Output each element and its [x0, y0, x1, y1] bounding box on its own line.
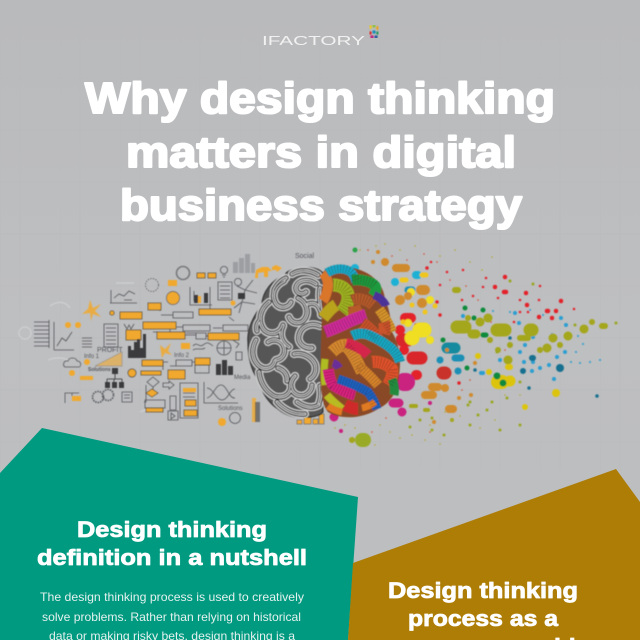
panel body text: The design thinking process is used to creatively	[40, 590, 304, 604]
title: Why design thinking	[85, 74, 555, 123]
green splashes	[497, 376, 503, 383]
logo: iFactory	[262, 26, 378, 48]
panel body text	[40, 590, 304, 640]
doodle captions	[84, 253, 315, 412]
panel heading	[388, 578, 589, 640]
doodle captions: PROFIT	[97, 347, 123, 354]
panel: design thinking definition	[0, 428, 358, 640]
panel: design thinking process	[348, 469, 640, 640]
right hemisphere: coloured swirls	[320, 266, 400, 417]
dark chart bars and skyline	[105, 293, 260, 422]
panel heading: definition in a nutshell	[37, 545, 307, 570]
doodle captions: Info 1	[84, 354, 100, 360]
brain	[248, 266, 400, 417]
yellow splashes	[498, 375, 502, 389]
doodle captions: Solutions	[88, 367, 111, 373]
grey bar chart top right	[233, 254, 255, 273]
doodle captions: Info 2	[174, 353, 190, 359]
orange splashes	[400, 290, 425, 303]
doodle tree connector	[107, 374, 122, 382]
blue splashes	[463, 313, 566, 379]
business doodles on the left of the brain	[19, 253, 324, 426]
panel heading: process as a	[408, 606, 559, 631]
olive splashes	[457, 327, 532, 330]
panel heading: Design thinking	[388, 578, 578, 603]
title: business strategy	[120, 181, 523, 230]
title	[85, 74, 555, 230]
doodle captions: Social	[295, 253, 315, 260]
faint ghost doodles	[19, 283, 162, 412]
left hemisphere: black and white line art	[248, 268, 323, 417]
panel body text: solve problems. Rather than relying on historical	[42, 610, 301, 624]
grey sketch lines and boxes	[34, 266, 257, 424]
logo: iFactory: IFACTORY	[262, 33, 366, 48]
paint splatter on the right of the brain	[334, 244, 616, 445]
fine speckle	[335, 244, 520, 445]
red splashes	[495, 277, 561, 318]
title: matters in digital	[126, 128, 516, 177]
magenta splashes	[404, 373, 406, 391]
orange label boxes	[65, 265, 324, 426]
panel heading: Design thinking	[77, 517, 267, 542]
panel heading	[37, 517, 307, 570]
doodle captions: Solutions	[218, 406, 243, 412]
doodle captions: Media	[234, 375, 251, 381]
